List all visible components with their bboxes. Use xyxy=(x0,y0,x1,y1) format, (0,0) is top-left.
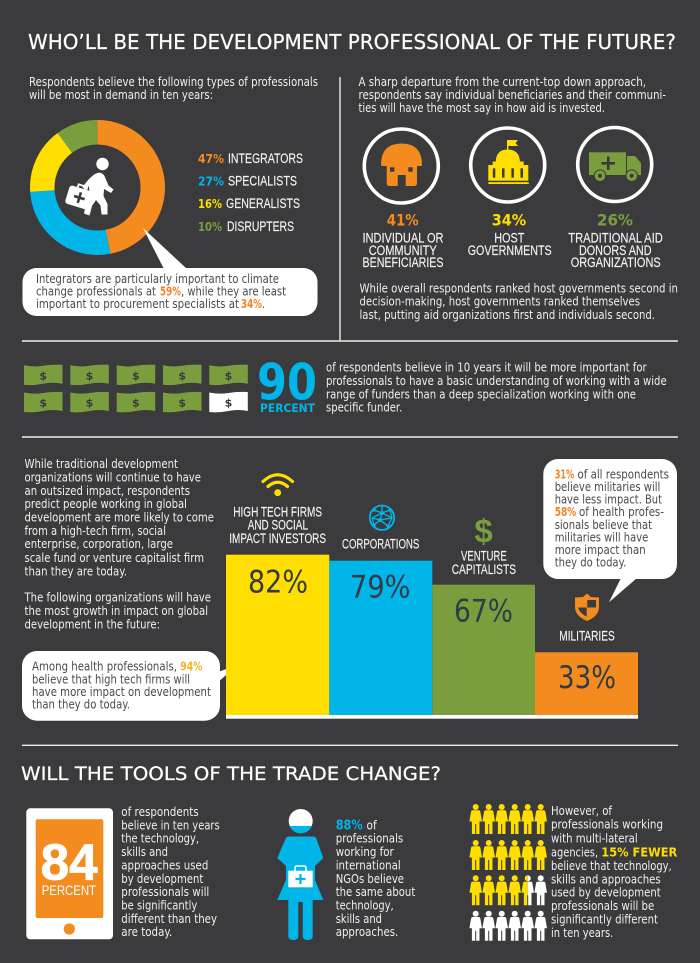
intro text: predict people working in global xyxy=(24,497,187,511)
intro text: an outsized impact, respondents xyxy=(24,484,190,498)
icon: nurse figure xyxy=(277,809,323,940)
stat: traditional donors: ORGANIZATIONS xyxy=(571,255,661,270)
tablet text: by development xyxy=(121,872,204,886)
multi-lateral text: professionals will be xyxy=(551,899,654,913)
icon row: ten dollar bills: $ xyxy=(86,396,93,410)
panel: NGO professionals 88 percent xyxy=(277,809,416,940)
icon: person walking with medical case xyxy=(65,158,114,216)
multi-lateral text: professionals working xyxy=(551,818,663,832)
multi-lateral text xyxy=(551,804,678,940)
multi-lateral text: significantly different xyxy=(551,912,658,926)
icon: aid truck in ring xyxy=(578,128,652,202)
title: WHO’LL BE THE DEVELOPMENT PROFESSIONAL OF THE FUTURE? xyxy=(28,30,676,54)
intro text: from a high-tech firm, social xyxy=(24,524,166,538)
donut chart xyxy=(42,132,153,243)
intro text xyxy=(24,457,214,631)
stat: traditional donors: 26% xyxy=(597,211,633,230)
callout: health professionals: believe that high tech firms will xyxy=(32,672,190,686)
callout: integrators: change professionals at xyxy=(36,284,156,298)
icon: tablet xyxy=(26,808,113,939)
NGO text: the same about xyxy=(336,885,416,899)
tablet text: skills and xyxy=(121,845,168,859)
multi-lateral text: with multi-lateral xyxy=(551,831,638,845)
callout: health professionals: Among health professionals, xyxy=(32,660,177,674)
NGO text: professionals xyxy=(336,832,403,846)
legend: specialists xyxy=(198,174,297,188)
stat: beneficiaries: BENEFICIARIES xyxy=(362,255,444,270)
multi-lateral text: 15% FEWER xyxy=(601,844,678,859)
label: high tech firms: HIGH TECH FIRMS xyxy=(233,504,322,519)
bar: high tech firms 82%: 82% xyxy=(248,565,308,601)
heading: tools of the trade: WILL THE TOOLS OF THE TRADE CHANGE? xyxy=(21,764,441,785)
label: corporations: CORPORATIONS xyxy=(342,537,419,552)
icon row: ten dollar bills: $ xyxy=(132,396,140,410)
icon row: ten dollar bills: $ xyxy=(225,396,232,410)
icon row: ten dollar bills: $ xyxy=(86,369,93,382)
intro text: While traditional development xyxy=(24,457,178,471)
intro text: enterprise, corporation, large xyxy=(24,537,173,551)
multi-lateral text: believe that technology, xyxy=(551,859,672,873)
icon: tablet: 84 xyxy=(41,833,98,890)
intro text: ties will have the most say in how aid is invested. xyxy=(358,101,605,115)
panel: in-demand professionals xyxy=(22,75,318,316)
tablet text: approaches used xyxy=(121,858,208,872)
legend: specialists: SPECIALISTS xyxy=(228,174,297,188)
callout: integrators: important to procurement specialists at xyxy=(36,297,239,311)
stat: host governments: 34% xyxy=(492,211,526,230)
NGO text: 88% xyxy=(336,818,363,833)
tablet text: of respondents xyxy=(121,805,199,819)
stat: host governments: HOST xyxy=(494,231,524,246)
icon: hut in ring xyxy=(364,129,438,203)
stat: beneficiaries xyxy=(362,211,444,270)
panel: organizations impact xyxy=(22,457,677,721)
stat: beneficiaries: 41% xyxy=(387,211,419,230)
icon: wifi xyxy=(263,475,292,496)
callout: integrators xyxy=(22,228,318,316)
callout: militaries: of health profes- xyxy=(579,505,664,519)
intro text: A sharp departure from the current-top down approach, xyxy=(358,75,646,89)
icon row: ten dollar bills: $ xyxy=(39,369,47,382)
callout: integrators: , while they are least xyxy=(181,284,286,298)
callout: militaries: 31% xyxy=(555,467,574,481)
funders text xyxy=(326,361,667,415)
tablet text: are today. xyxy=(121,925,172,939)
big number 90 percent: 90 xyxy=(257,353,317,411)
callout: militaries: militaries will have xyxy=(555,531,648,545)
icon: globe network xyxy=(370,506,394,530)
funders text: specific funder. xyxy=(326,401,402,415)
tablet text xyxy=(121,805,220,939)
label: high tech firms: IMPACT INVESTORS xyxy=(229,531,326,546)
stat: host governments: GOVERNMENTS xyxy=(468,243,552,258)
NGO text: skills and xyxy=(336,912,382,926)
NGO text: NGOs believe xyxy=(336,872,404,886)
legend: integrators: INTEGRATORS xyxy=(228,151,303,166)
legend: specialists: 27% xyxy=(198,174,224,188)
callout: health professionals: than they do today. xyxy=(32,698,130,712)
stat: traditional donors: DONORS AND xyxy=(579,243,652,258)
bar: high tech firms 82% xyxy=(226,555,329,715)
bar: venture capitalists 67% xyxy=(432,585,535,715)
panel: who has the most say xyxy=(358,75,678,322)
callout: militaries: they do today. xyxy=(555,556,626,570)
label: militaries: MILITARIES xyxy=(559,628,615,643)
NGO text: approaches. xyxy=(336,925,398,939)
callout: health professionals xyxy=(22,651,238,721)
legend: integrators: 47% xyxy=(198,152,224,166)
closing text xyxy=(360,282,678,322)
big number 90 percent: PERCENT xyxy=(260,401,315,415)
intro text: than they are today. xyxy=(24,565,127,579)
intro text: The following organizations will have xyxy=(24,591,211,605)
multi-lateral text: in ten years. xyxy=(551,926,613,940)
icon row: ten dollar bills: $ xyxy=(178,369,186,382)
icon row: ten dollar bills: $ xyxy=(39,396,47,410)
multi-lateral text: used by development xyxy=(551,886,661,900)
icon: capitol in ring xyxy=(471,128,545,202)
stat: traditional donors: TRADITIONAL AID xyxy=(568,231,663,246)
NGO text: technology, xyxy=(336,898,394,912)
intro text: Respondents believe the following types of professionals xyxy=(29,75,318,89)
intro text xyxy=(29,75,318,102)
callout: militaries: sionals believe that xyxy=(555,518,652,532)
bar: venture capitalists 67%: 67% xyxy=(454,593,513,629)
bar: corporations 79%: 79% xyxy=(350,569,410,605)
icon row: ten dollar bills: $ xyxy=(178,396,186,410)
legend: disrupters: DISRUPTERS xyxy=(227,219,294,234)
intro text: organizations will continue to have xyxy=(24,471,201,485)
legend: generalists: 16% xyxy=(198,197,222,211)
callout: militaries: more impact than xyxy=(555,543,646,557)
funders text: of respondents believe in 10 years it will be more important for xyxy=(326,361,647,375)
intro text: development in the future: xyxy=(24,617,160,631)
icon: tablet: PERCENT xyxy=(42,882,96,898)
tablet text: professionals will xyxy=(121,885,209,899)
legend: integrators xyxy=(198,151,303,166)
label: high tech firms: AND SOCIAL xyxy=(248,518,308,533)
legend: disrupters xyxy=(198,219,294,234)
bar: militaries 33% xyxy=(535,652,638,715)
bar: corporations 79% xyxy=(329,561,432,715)
closing text: decision-making, host governments ranked themselves xyxy=(360,295,640,309)
stat: host governments xyxy=(468,211,552,258)
NGO text: of xyxy=(366,818,377,832)
icon row: ten dollar bills: $ xyxy=(225,369,232,382)
intro text: will be most in demand in ten years: xyxy=(29,88,213,102)
NGO text xyxy=(336,818,416,939)
multi-lateral text: agencies, xyxy=(551,845,598,859)
tablet text: different than they xyxy=(121,912,217,926)
bar chart xyxy=(226,555,638,719)
callout: integrators: 59% xyxy=(160,284,181,298)
stat: beneficiaries: INDIVIDUAL OR xyxy=(362,231,444,246)
label: venture capitalists: VENTURE xyxy=(461,549,507,564)
intro text xyxy=(358,75,666,115)
label: venture capitalists: CAPITALISTS xyxy=(452,562,516,577)
NGO text: working for xyxy=(336,845,394,859)
tablet text: be significantly xyxy=(121,898,197,912)
icon row: ten dollar bills xyxy=(24,365,248,412)
NGO text: international xyxy=(336,858,401,872)
icon: shield xyxy=(575,594,599,621)
legend: generalists xyxy=(198,196,300,211)
tablet text: believe in ten years xyxy=(121,818,220,832)
panel: 90 percent funders xyxy=(24,353,667,415)
multi-lateral text: skills and approaches xyxy=(551,872,661,886)
panel: tablet 84 percent xyxy=(26,805,220,939)
icon row: ten dollar bills: $ xyxy=(132,369,140,382)
intro text: the most growth in impact on global xyxy=(24,604,208,618)
callout: militaries: 58% xyxy=(555,505,576,519)
callout: militaries: of all respondents xyxy=(578,467,669,481)
callout: militaries: believe militaries will xyxy=(555,480,660,494)
legend xyxy=(198,151,303,234)
callout: integrators: . xyxy=(262,297,265,311)
callout: health professionals: have more impact on development xyxy=(32,685,211,699)
funders text: range of funders than a deep specialization working with one xyxy=(326,387,636,401)
stat: traditional donors xyxy=(568,211,663,270)
label: high tech firms xyxy=(229,504,326,546)
callout: militaries: have less impact. But xyxy=(555,493,662,507)
icon: dollar sign: $ xyxy=(474,512,493,550)
callout: health professionals: 94% xyxy=(180,660,202,674)
callout: integrators: Integrators are particularly important to climate xyxy=(36,272,279,286)
label: venture capitalists xyxy=(452,549,516,577)
intro text: development are more likely to come xyxy=(24,511,214,525)
tablet text: the technology, xyxy=(121,832,199,846)
intro text: scale fund or venture capitalist firm xyxy=(24,551,204,565)
legend: disrupters: 10% xyxy=(198,220,222,234)
callout: integrators: 34% xyxy=(241,297,262,311)
bar: militaries 33%: 33% xyxy=(558,660,616,696)
legend: generalists: GENERALISTS xyxy=(226,196,300,211)
stat: beneficiaries: COMMUNITY xyxy=(369,243,437,258)
callout: militaries xyxy=(543,459,677,602)
multi-lateral text: However, of xyxy=(551,804,613,818)
icon grid: people pictogram xyxy=(469,804,547,941)
panel: multi-lateral 15 percent fewer xyxy=(469,804,678,941)
